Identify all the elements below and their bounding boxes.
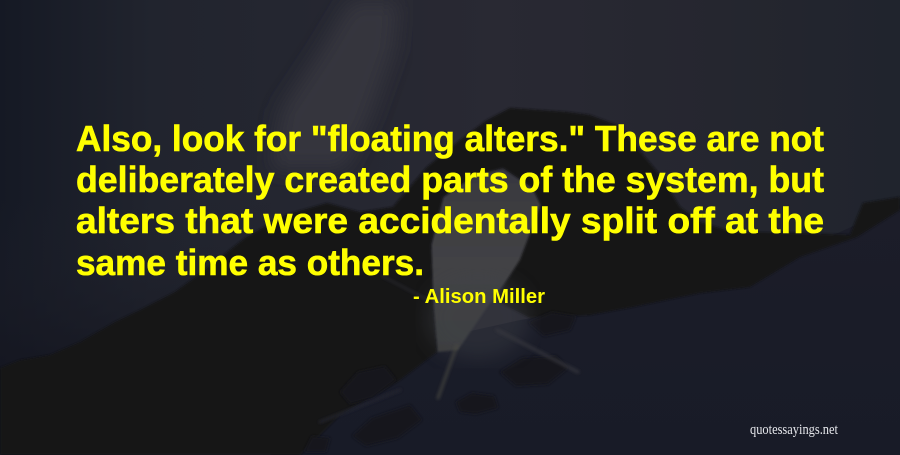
quote line 3: alters that were accidentally split off at the [76, 200, 824, 241]
background: sun flare rays [320, 276, 578, 422]
quote line 2: deliberately created parts of the system, but [76, 159, 824, 200]
quote text [76, 118, 824, 283]
background: snowfield [270, 205, 900, 455]
watermark: quotessayings.net [750, 422, 839, 438]
background: mountain silhouette [0, 108, 900, 455]
background: pale cloud streak [270, 0, 400, 170]
quote line 1: Also, look for "floating alters." These are not [76, 118, 824, 159]
flare ray: lower left [320, 390, 400, 422]
flare ray: right [497, 330, 578, 372]
author attribution: - Alison Miller [413, 285, 545, 308]
background: shadowed rock patches [304, 312, 576, 452]
background: sun glow [426, 276, 530, 360]
background: lit gap under the rock arch [431, 168, 541, 352]
flare ray: upper left [382, 276, 428, 300]
background: lower sky shading [0, 200, 300, 380]
flare ray: downward [438, 345, 457, 398]
quote line 4: same time as others. [76, 242, 424, 283]
